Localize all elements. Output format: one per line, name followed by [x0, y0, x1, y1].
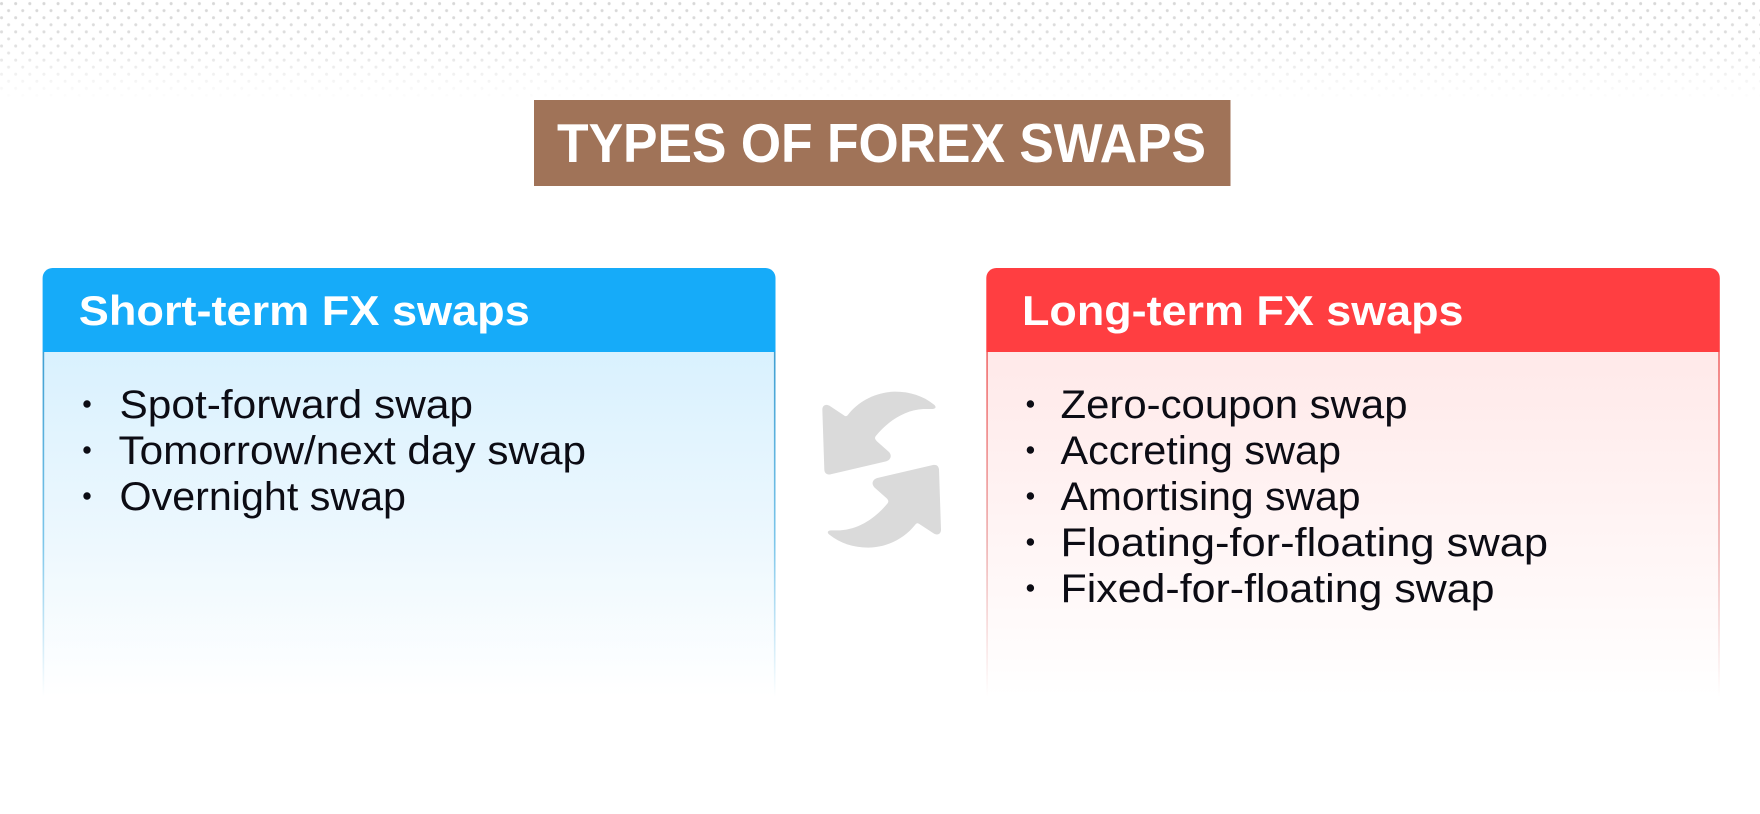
list: long-term swaps [1027, 383, 1548, 611]
list: short-term swaps: Spot-forward swap [120, 383, 473, 427]
heading: short-term: Short-term FX swaps [79, 287, 530, 334]
icon: swap arrows [822, 392, 941, 548]
panel: long-term FX swaps [986, 268, 1720, 697]
panel edges: long-term [986, 352, 1720, 697]
list: short-term swaps [83, 383, 586, 519]
list: long-term swaps: Zero-coupon swap [1060, 383, 1408, 427]
title [534, 100, 1230, 186]
panel body: long-term [986, 352, 1720, 697]
dotted background pattern [0, 2, 1760, 82]
panel: short-term FX swaps [43, 268, 776, 697]
panel header: short-term [43, 268, 776, 352]
panel header: long-term [986, 268, 1720, 352]
list: long-term swaps: Fixed-for-floating swap [1060, 567, 1494, 611]
panel edges: short-term [43, 352, 776, 697]
list: short-term swaps: Overnight swap [120, 475, 406, 519]
heading: long-term: Long-term FX swaps [1022, 287, 1464, 334]
list: long-term swaps: Amortising swap [1060, 475, 1360, 519]
panel body: short-term [43, 352, 776, 697]
title: TYPES OF FOREX SWAPS [557, 112, 1206, 174]
list: long-term swaps: Floating-for-floating swap [1060, 521, 1548, 565]
list: short-term swaps: Tomorrow/next day swap [118, 429, 586, 473]
list: long-term swaps: Accreting swap [1060, 429, 1341, 473]
